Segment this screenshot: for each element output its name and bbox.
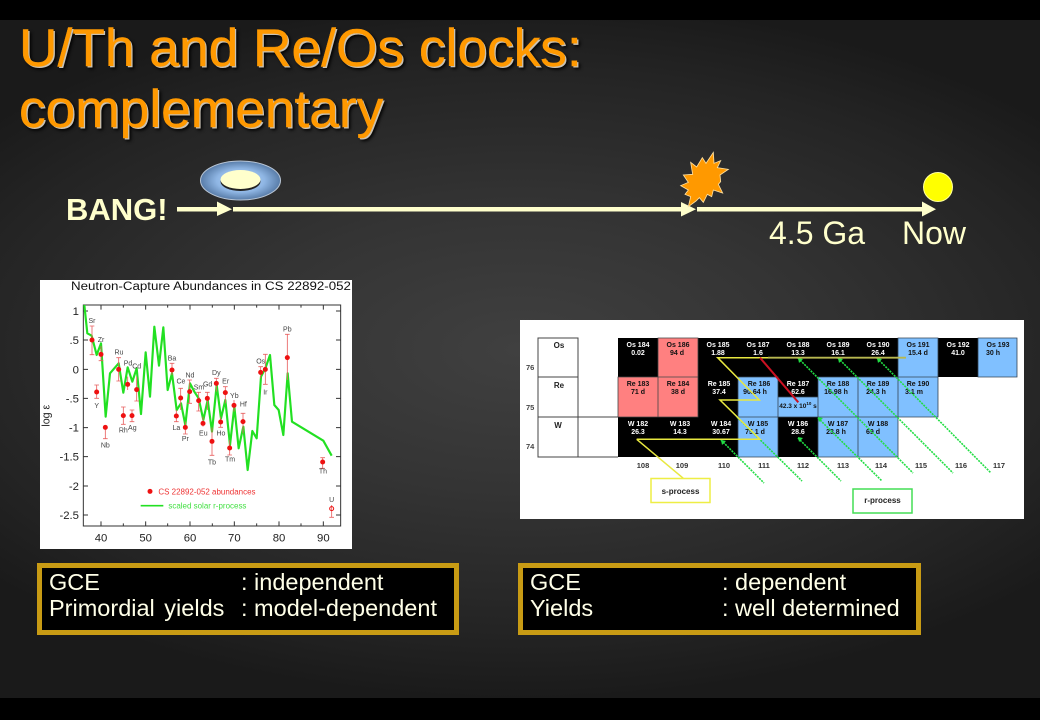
label cells <box>538 338 618 457</box>
dark isotope labels: Re 190 <box>907 381 929 388</box>
dark isotope labels: s <box>811 403 817 410</box>
callout: s-process: s-process <box>662 487 700 496</box>
arrow: supernova to now <box>697 202 936 216</box>
element labels: Hf <box>240 402 247 409</box>
label: BANG!: BANG! <box>66 192 168 227</box>
element labels: U <box>329 497 334 504</box>
white isotope labels: 30.67 <box>712 429 730 436</box>
neutron numbers: 116 <box>955 461 967 470</box>
x axis labels: 50 <box>139 533 152 545</box>
y axis labels: -2.5 <box>59 510 79 522</box>
neutron numbers: 108 <box>637 461 649 470</box>
element labels: Pd <box>124 361 132 368</box>
white isotope labels: Os 188 <box>787 342 810 349</box>
element labels: Cd <box>132 363 141 370</box>
white isotope labels: Os 189 <box>827 342 850 349</box>
white isotope labels: 62.6 <box>791 389 805 396</box>
element labels: Pr <box>182 436 189 443</box>
y axis labels: 0 <box>73 364 79 376</box>
white isotope labels: Os 187 <box>747 342 770 349</box>
dark isotope labels: 30 h <box>986 350 1000 357</box>
s-to-r shared line <box>768 357 906 359</box>
s-process pointer <box>637 439 683 478</box>
dark isotope labels: 94 d <box>670 350 684 357</box>
icon: supernova burst <box>681 152 728 207</box>
proton numbers: 75 <box>526 403 534 412</box>
white isotope labels: 37.4 <box>712 389 726 396</box>
axis frame <box>83 305 341 526</box>
element labels: Th <box>319 468 327 475</box>
neutron numbers: 112 <box>797 461 809 470</box>
callout: r-process: r-process <box>864 496 901 505</box>
neutron numbers: 117 <box>993 461 1005 470</box>
element labels: Er <box>222 379 230 386</box>
dark isotope labels: 23.8 h <box>826 429 846 436</box>
white isotope labels: 41.0 <box>951 350 965 357</box>
white isotope labels: Os 185 <box>707 342 730 349</box>
element labels: Ce <box>177 379 186 386</box>
element labels: Gd <box>203 381 212 388</box>
white isotope labels: Re 185 <box>708 381 730 388</box>
x axis labels: 70 <box>228 533 241 545</box>
dark isotope labels: W 187 <box>828 421 848 428</box>
text box: right conclusions: Yields <box>530 595 593 621</box>
icon: sun <box>924 172 952 202</box>
dark isotope labels: 69 d <box>866 429 880 436</box>
title <box>19 19 582 142</box>
beta decay arrow <box>760 358 798 402</box>
proton numbers <box>526 363 535 451</box>
r-process arrows <box>721 358 991 483</box>
dark isotope labels: Re 188 <box>827 381 849 388</box>
r-process line <box>84 305 332 470</box>
element labels: Ir <box>263 389 268 396</box>
x axis labels: 90 <box>317 533 330 545</box>
text box: left conclusions <box>37 563 459 635</box>
element labels: Pb <box>283 326 292 333</box>
white isotope labels: Os 184 <box>627 342 650 349</box>
white isotope labels: W 186 <box>788 421 808 428</box>
dark isotope labels: 24.3 h <box>866 389 886 396</box>
text box: right conclusions <box>518 563 921 635</box>
y axis labels: -1 <box>69 423 79 435</box>
x axis labels <box>95 533 330 545</box>
arrow: disc to supernova <box>233 202 696 216</box>
legend: CS 22892-052 abundances <box>158 487 256 496</box>
y axis labels <box>59 306 79 522</box>
text box: right conclusions: GCE <box>530 569 581 595</box>
neutron numbers: 115 <box>915 461 927 470</box>
white isotope labels: Os 190 <box>867 342 890 349</box>
dark isotope labels: 90.64 h <box>743 389 767 396</box>
label: 4.5 Ga: 4.5 Ga <box>769 215 865 251</box>
text box: left conclusions: GCE <box>49 569 100 595</box>
element labels: Nd <box>186 373 195 380</box>
r-process arrowheads <box>721 358 882 445</box>
callout: s-process <box>651 478 710 502</box>
error bars <box>90 326 334 517</box>
element labels: Os <box>256 358 266 365</box>
element labels: Yb <box>230 393 239 400</box>
neutron numbers: 110 <box>718 461 730 470</box>
proton numbers: 76 <box>526 363 534 372</box>
y axis labels: .5 <box>70 335 79 347</box>
s-process path <box>637 358 768 439</box>
dark isotope labels: Re 184 <box>667 381 689 388</box>
title: U/Th and Re/Os clocks: <box>19 19 582 78</box>
element labels: Sr <box>89 318 96 325</box>
white isotope labels: W 183 <box>670 421 690 428</box>
dark isotope labels: Os 191 <box>907 342 930 349</box>
x axis labels: 40 <box>95 533 107 545</box>
dark isotope labels: 15.4 d <box>908 350 928 357</box>
element names: W <box>554 421 562 430</box>
dark isotope labels: Re 189 <box>867 381 889 388</box>
callout: r-process <box>853 489 912 513</box>
white isotope labels: 0.02 <box>631 350 645 357</box>
element names: Os <box>554 341 565 350</box>
neutron numbers: 113 <box>837 461 849 470</box>
y axis title: log ε <box>40 404 52 427</box>
element labels: Ru <box>115 349 124 356</box>
element labels: La <box>172 425 180 432</box>
neutron numbers: 114 <box>875 461 888 470</box>
legend: scaled solar r-process <box>168 502 246 511</box>
element labels: Nb <box>101 443 110 450</box>
dark isotope labels <box>627 342 1010 436</box>
title: complementary <box>19 80 383 139</box>
element labels: Tb <box>208 460 216 467</box>
white isotope labels: Os 192 <box>947 342 970 349</box>
element names <box>554 341 565 430</box>
white isotope labels: 1.88 <box>711 350 725 357</box>
white isotope labels: 16.1 <box>831 350 845 357</box>
element labels: Y <box>94 403 99 410</box>
white isotope labels: W 184 <box>711 421 731 428</box>
element labels: Ag <box>128 425 137 432</box>
white isotope labels: 28.6 <box>791 429 805 436</box>
element labels: Ba <box>168 355 176 362</box>
chart title: Neutron-Capture Abundances in CS 22892-052 <box>71 279 351 293</box>
y axis labels: -1.5 <box>59 452 79 464</box>
y axis labels: 1 <box>73 306 79 318</box>
text box: right conclusions: : well determined <box>722 595 900 621</box>
neutron numbers: 111 <box>758 461 770 470</box>
dark isotope labels: 42.3 x 10 <box>779 403 806 410</box>
white isotope labels: 1.6 <box>753 350 763 357</box>
white isotope labels: 26.4 <box>871 350 885 357</box>
y axis labels: -.5 <box>66 393 79 405</box>
label: Now: Now <box>902 215 966 251</box>
text box: left conclusions: Primordial yields <box>49 595 224 621</box>
abundance points <box>89 337 334 511</box>
proton numbers: 74 <box>526 442 535 451</box>
white isotope labels: 26.3 <box>631 429 645 436</box>
blue cells <box>738 338 1017 457</box>
element labels <box>89 318 334 504</box>
white isotope labels: 13.3 <box>791 350 805 357</box>
legend <box>141 487 256 511</box>
white isotope labels: W 182 <box>628 421 648 428</box>
element labels: Rh <box>119 428 128 435</box>
dark isotope labels: Os 186 <box>667 342 690 349</box>
element labels: Tm <box>225 457 235 464</box>
black cells <box>618 338 978 457</box>
dark isotope labels: 16.98 h <box>824 389 848 396</box>
dark isotope labels: 3.1 m <box>905 389 923 396</box>
white isotope labels <box>627 342 970 436</box>
element names: Re <box>554 381 565 390</box>
text box: right conclusions: : dependent <box>722 569 846 595</box>
dark isotope labels: W 188 <box>868 421 888 428</box>
neutron numbers <box>637 461 1005 470</box>
icon: protoplanetary disc <box>200 161 280 200</box>
y axis labels: -2 <box>69 481 79 493</box>
pink cells <box>618 338 698 417</box>
dark isotope labels: 75.1 d <box>745 429 765 436</box>
arrow: bang to disc <box>177 202 232 216</box>
dark isotope labels: Os 193 <box>987 342 1010 349</box>
dark isotope labels: 71 d <box>631 389 645 396</box>
text box: left conclusions: : model-dependent <box>241 595 437 621</box>
element labels: Ho <box>217 431 226 438</box>
dark isotope labels: Re 183 <box>627 381 649 388</box>
element labels: Zr <box>98 337 105 344</box>
dark isotope labels: 38 d <box>671 389 685 396</box>
neutron numbers: 109 <box>676 461 688 470</box>
white isotope labels: 14.3 <box>673 429 687 436</box>
element labels: Dy <box>212 370 221 377</box>
element labels: Sm <box>194 385 204 392</box>
dark isotope labels: Re 186 <box>748 381 770 388</box>
x axis labels: 60 <box>184 533 196 545</box>
dark isotope labels: W 185 <box>748 421 768 428</box>
dark isotope labels: 10 <box>806 401 812 406</box>
text box: left conclusions: : independent <box>241 569 383 595</box>
x axis labels: 80 <box>273 533 285 545</box>
white isotope labels: Re 187 <box>787 381 809 388</box>
element labels: Eu <box>199 431 208 438</box>
